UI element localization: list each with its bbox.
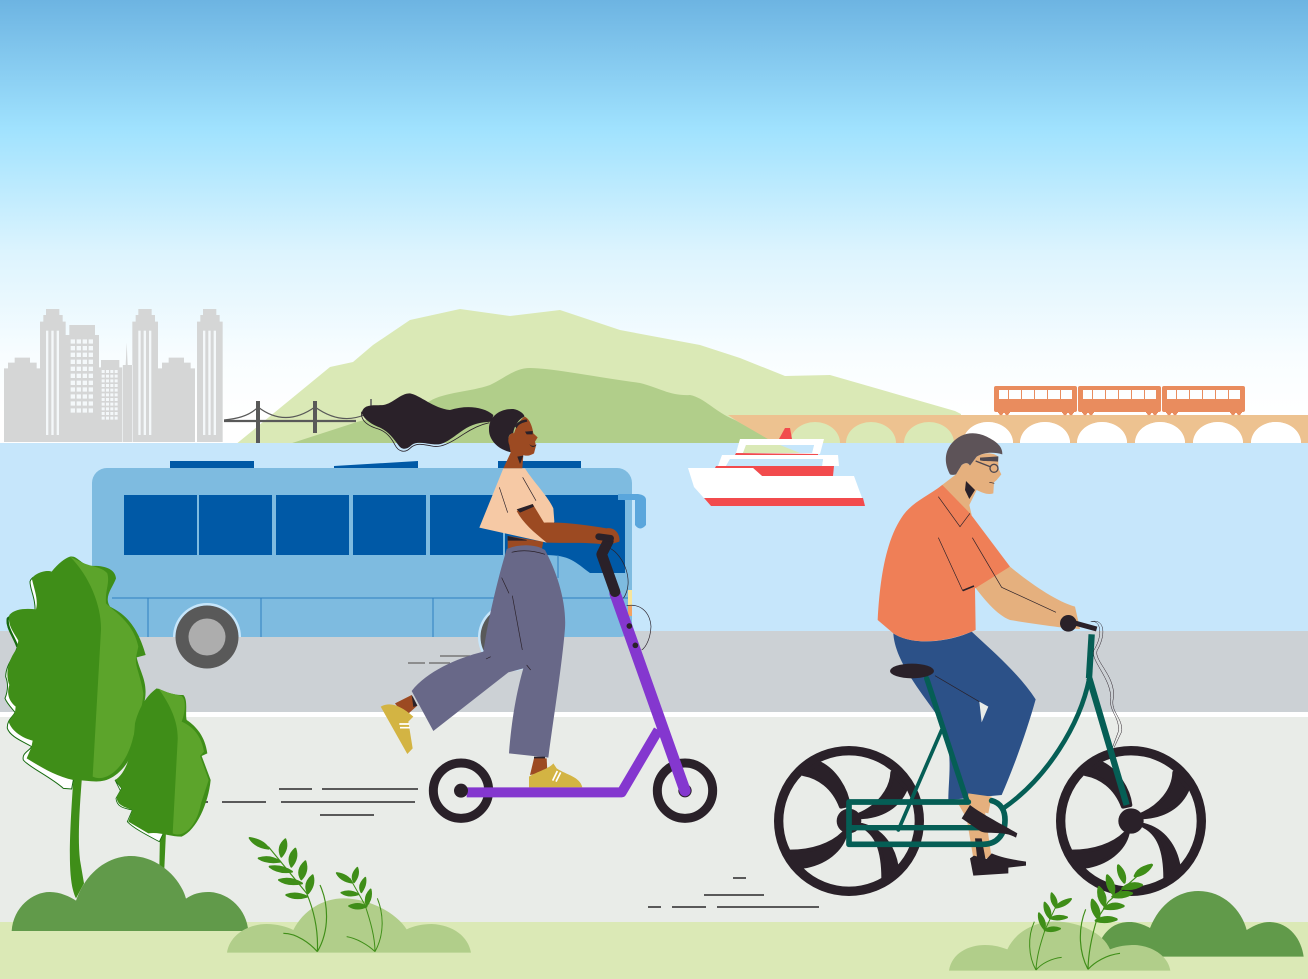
city skyline [4, 309, 223, 442]
river [0, 443, 1308, 631]
big tree shadow edge [5, 574, 73, 789]
hair [362, 393, 493, 449]
dark green bush [1102, 891, 1304, 957]
kerb [0, 712, 1308, 717]
sky [0, 0, 1308, 445]
bike frame [849, 634, 1127, 844]
scooter rider [361, 393, 713, 818]
road speed lines [408, 656, 470, 663]
brake cable [1091, 621, 1122, 748]
trousers [412, 545, 565, 758]
beard shadow [965, 481, 975, 499]
ponytail base and head [489, 409, 524, 452]
big tree foliage [7, 556, 146, 781]
front ankle [967, 793, 992, 813]
suspension bridge [224, 399, 371, 443]
grass verge [0, 922, 1308, 979]
white arch openings [963, 422, 1301, 443]
face and neck [940, 453, 1001, 523]
left tree group [5, 556, 471, 953]
glasses [976, 461, 998, 472]
ferry boat [688, 428, 865, 506]
shirt folds [499, 477, 536, 513]
small tree shadow edge [115, 780, 163, 842]
shirt [878, 485, 1010, 641]
brow, eye, mouth, neck shadow [515, 419, 537, 464]
light green mountain [235, 309, 961, 445]
fern left [250, 838, 327, 952]
hair [946, 433, 1002, 475]
big tree trunk [70, 777, 84, 898]
arm and hand [517, 504, 620, 545]
face and neck [503, 417, 538, 468]
arched railway viaduct [728, 415, 1308, 443]
dark green bush [12, 856, 248, 931]
midriff [508, 536, 543, 550]
small tree trunk [159, 832, 166, 868]
upper body [479, 409, 620, 545]
pavement speed lines [200, 789, 819, 907]
brow and mouth [980, 456, 998, 462]
fern left [1030, 893, 1071, 970]
trouser folds [486, 551, 545, 670]
saddle [890, 664, 934, 678]
scooter frame [467, 730, 658, 792]
hair highlight [361, 412, 489, 451]
city bus [92, 461, 646, 671]
small tree foliage [115, 688, 211, 837]
dark green mountain [283, 368, 780, 446]
front ankle and shoe [534, 757, 545, 759]
light green bush [949, 922, 1170, 971]
shoes [962, 805, 1017, 838]
fern right [1080, 865, 1152, 969]
orange train [994, 386, 1245, 415]
arm [973, 567, 1080, 629]
rear wheel [779, 751, 919, 891]
back ankle and shoe [395, 695, 417, 717]
handlebar [602, 541, 615, 592]
fern right [337, 868, 382, 952]
road [0, 631, 1308, 712]
small tree highlight [158, 688, 209, 834]
scooter wheels [433, 763, 489, 818]
right bushes and ferns [949, 865, 1304, 971]
head [940, 433, 1002, 523]
shirt lines [938, 497, 1056, 612]
back leg [956, 800, 992, 858]
cables [610, 548, 651, 650]
crop top [479, 468, 554, 543]
big tree highlight [70, 557, 143, 778]
front wheel [1061, 751, 1201, 891]
trousers [893, 632, 1036, 800]
light green bush [227, 898, 471, 953]
pavement [0, 717, 1308, 922]
handlebar grip [1060, 615, 1077, 632]
sleeve edge [517, 504, 534, 513]
cyclist [779, 433, 1201, 891]
